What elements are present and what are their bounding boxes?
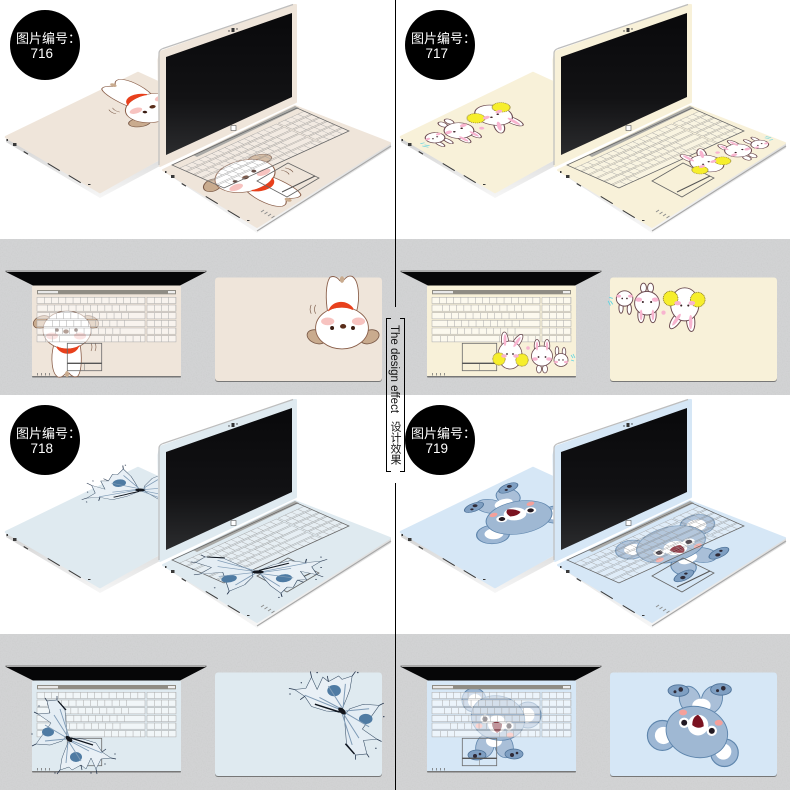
badge: picture number xyxy=(405,10,476,80)
top view keyboard deck xyxy=(5,270,207,378)
closed laptop lid with koala art xyxy=(401,468,578,593)
quadrant: design 716 xyxy=(0,4,395,395)
top view keyboard deck xyxy=(5,665,207,774)
badge: picture number: 716 xyxy=(30,46,53,61)
grey band xyxy=(395,634,790,790)
top view lid xyxy=(215,276,382,382)
grey band xyxy=(0,239,395,395)
grey band xyxy=(395,239,790,395)
badge: picture number: 719 xyxy=(426,441,448,456)
top view keyboard deck xyxy=(400,270,602,378)
badge: picture number: 图片编号： xyxy=(16,31,81,46)
badge: picture number: 图片编号： xyxy=(16,426,81,441)
badge: picture number: 图片编号： xyxy=(411,31,476,46)
open laptop perspective view xyxy=(158,400,391,628)
caption: the design effect: The design effect xyxy=(388,325,400,414)
quadrant: design 718 xyxy=(0,400,395,790)
top view lid xyxy=(608,278,777,382)
caption: the design effect xyxy=(388,325,402,466)
badge: picture number xyxy=(405,405,476,475)
closed laptop lid with rabbit art xyxy=(401,73,570,198)
badge: picture number xyxy=(10,405,81,475)
open laptop perspective view xyxy=(554,400,786,628)
badge: picture number xyxy=(10,10,81,80)
open laptop perspective view xyxy=(158,4,391,233)
closed laptop lid with butterfly art xyxy=(6,454,208,593)
quadrant: design 719 xyxy=(395,400,790,790)
grey band xyxy=(0,634,395,790)
badge: picture number: 718 xyxy=(30,441,53,456)
top view keyboard deck xyxy=(400,665,602,772)
open laptop perspective view xyxy=(554,4,786,233)
badge: picture number: 图片编号： xyxy=(411,426,476,441)
closed laptop lid with dog art xyxy=(6,67,202,198)
top view lid xyxy=(610,672,777,777)
caption: the design effect: 设计效果 xyxy=(389,421,402,466)
badge: picture number: 717 xyxy=(426,46,448,61)
centre divider and vertical caption xyxy=(386,0,404,790)
quadrant: design 717 xyxy=(395,4,790,395)
top view lid xyxy=(215,671,384,777)
